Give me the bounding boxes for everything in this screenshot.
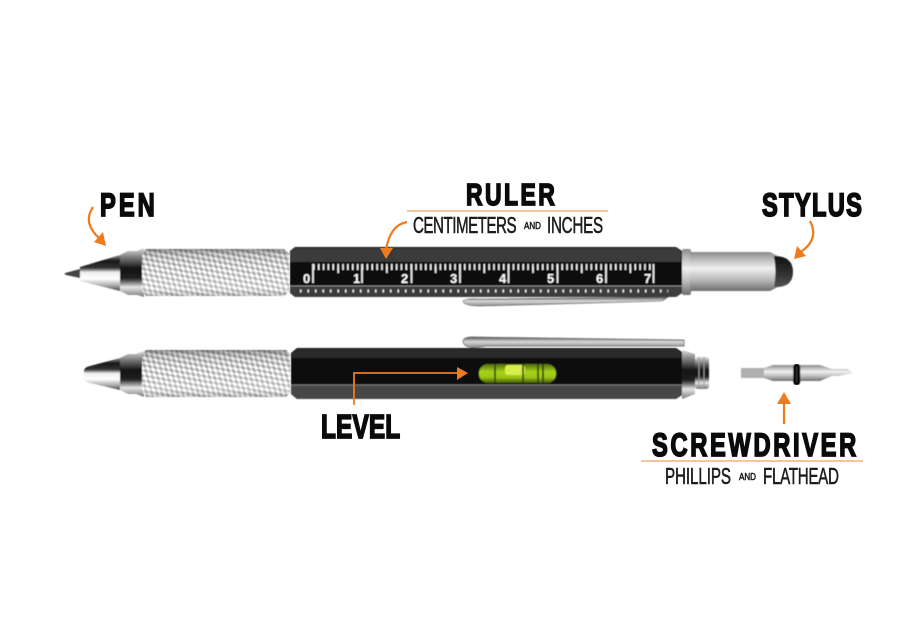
label: stylus <box>762 188 862 259</box>
ruler subtitle inches: INCHES <box>547 213 603 239</box>
stylus collar <box>682 249 691 295</box>
lower pen collar <box>120 351 144 397</box>
top pen with ruler and stylus <box>65 247 793 306</box>
end collar <box>682 350 695 399</box>
label: ruler <box>380 177 608 259</box>
label: pen <box>89 188 155 246</box>
bit body <box>764 365 853 381</box>
label: ruler: RULER <box>466 177 555 212</box>
centimeter ticks <box>313 264 654 283</box>
stylus barrel <box>690 252 778 291</box>
ruler subtitle and: AND <box>524 221 541 232</box>
ruler numbers: 2 <box>401 271 408 286</box>
ruler underline <box>407 210 608 212</box>
pen collar <box>120 248 144 297</box>
screwdriver bit <box>741 365 853 384</box>
arrow: ruler <box>380 222 407 259</box>
arrow: screwdriver <box>777 392 791 424</box>
lower pen body <box>291 348 682 399</box>
ruler body <box>290 247 682 297</box>
stylus tip <box>774 256 793 287</box>
arrow: stylus <box>794 221 813 259</box>
label: pen: PEN <box>100 188 155 223</box>
lower knurled grip <box>142 350 290 397</box>
ruler numbers: 1 <box>353 271 360 286</box>
pen tip <box>65 269 80 278</box>
ruler numbers: 5 <box>547 271 554 286</box>
lower pen tip cone <box>84 358 120 390</box>
screwdriver subtitle and: AND <box>739 472 756 483</box>
label: level: LEVEL <box>321 410 400 446</box>
level vial <box>479 364 556 383</box>
inch ticks <box>300 290 668 292</box>
arrow: pen <box>89 207 106 246</box>
ruler numbers <box>303 271 651 286</box>
label: level <box>321 367 468 446</box>
ruler numbers: 7 <box>644 271 651 286</box>
ruler numbers: 4 <box>499 271 507 286</box>
end cap <box>695 357 709 389</box>
screwdriver underline <box>641 460 863 462</box>
knurled grip <box>142 249 289 296</box>
label: screwdriver <box>641 392 863 490</box>
screwdriver subtitle phillips: PHILLIPS <box>665 464 731 490</box>
pen cone <box>80 255 120 291</box>
screwdriver subtitle flathead: FLATHEAD <box>763 464 839 490</box>
rubber ring <box>794 365 799 384</box>
top pen clip <box>463 297 668 306</box>
arrow: level <box>354 367 468 405</box>
ruler numbers: 6 <box>596 271 603 286</box>
label: stylus: STYLUS <box>762 188 862 223</box>
ruler subtitle centimeters: CENTIMETERS <box>413 213 517 239</box>
bottom pen with level and clip <box>84 337 709 399</box>
ruler numbers: 0 <box>303 271 310 286</box>
lower pen clip <box>463 337 684 348</box>
flathead end <box>741 368 764 378</box>
ruler numbers: 3 <box>450 271 457 286</box>
label: screwdriver: SCREWDRIVER <box>652 428 856 463</box>
